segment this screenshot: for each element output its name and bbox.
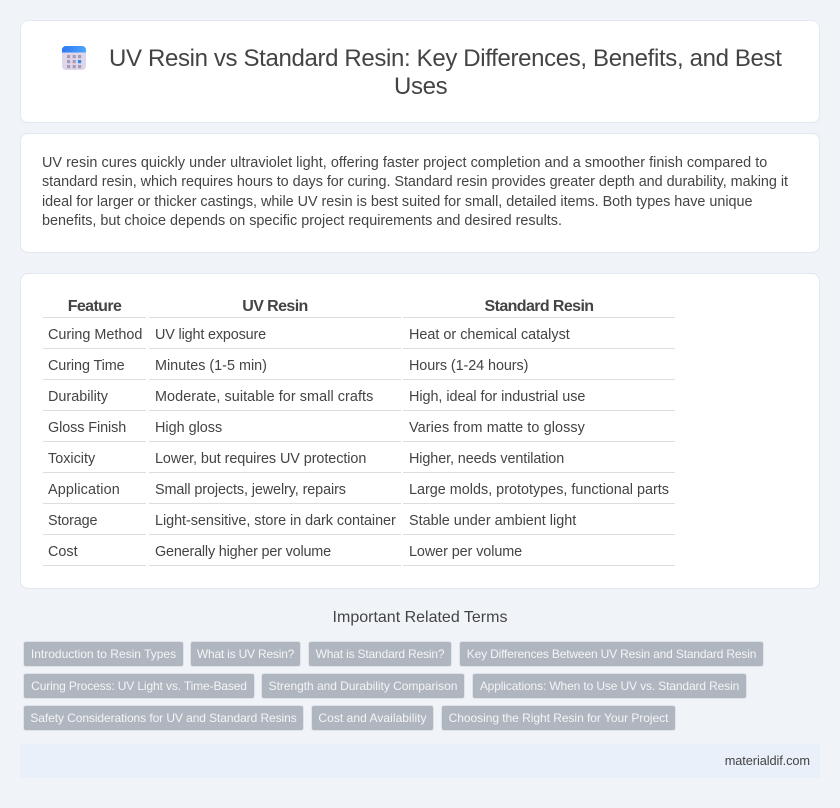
comparison table (43, 298, 675, 566)
tag list: related terms: Introduction to Resin Types (31, 647, 176, 661)
row: curing time (48, 358, 528, 374)
row: curing time: Minutes (1-5 min) (155, 358, 267, 374)
footer (20, 744, 820, 778)
row: gloss finish: Varies from matte to glossy (409, 420, 585, 436)
row: durability: Moderate, suitable for small crafts (155, 389, 373, 405)
tag list: related terms (23, 641, 764, 731)
tag list: related terms: Key Differences Between UV Resin and Standard Resin (467, 647, 756, 661)
row: application (48, 482, 669, 498)
row: toxicity: Higher, needs ventilation (409, 451, 564, 467)
row: cost: Lower per volume (409, 544, 522, 560)
row: cost: Generally higher per volume (155, 544, 331, 560)
title: UV Resin vs Standard Resin: Key Differences, Benefits, and Best (109, 45, 782, 72)
row: gloss finish (48, 420, 585, 436)
table header: UV Resin (242, 298, 308, 315)
row: curing time: Curing Time (48, 358, 125, 374)
panel: introduction (20, 133, 820, 253)
tag list: related terms: Cost and Availability (318, 711, 427, 725)
row: toxicity (48, 451, 564, 467)
row: curing method: Curing Method (48, 327, 142, 343)
panel: title header (20, 20, 820, 123)
text block: introduction: benefits, but choice depends on specific project requirements and desired results. (42, 213, 562, 229)
row: curing method (48, 327, 570, 343)
footer credit: materialdif.com (725, 753, 810, 768)
text block: introduction (42, 155, 788, 229)
tag list: related terms: Applications: When to Use UV vs. Standard Resin (480, 679, 739, 693)
text block: introduction: UV resin cures quickly under ultraviolet light, offering faster project completion and a smoother finish compared to (42, 155, 767, 171)
row: toxicity: Lower, but requires UV protection (155, 451, 366, 467)
row: durability (48, 389, 585, 405)
row: storage: Storage (48, 513, 97, 529)
tag list: related terms: What is UV Resin? (197, 647, 294, 661)
table header: Standard Resin (485, 298, 593, 315)
row: curing method: Heat or chemical catalyst (409, 327, 570, 343)
table header (68, 298, 594, 315)
row: cost (48, 544, 522, 560)
text block: introduction: standard resin, which requires hours to days for curing. Standard resin provides greater depth and durability, making it (42, 174, 788, 190)
title (109, 45, 782, 100)
row: application: Application (48, 482, 120, 498)
row: application: Large molds, prototypes, functional parts (409, 482, 669, 498)
table header: Feature (68, 298, 121, 315)
tag list: related terms: What is Standard Resin? (316, 647, 444, 661)
row: storage: Stable under ambient light (409, 513, 576, 529)
tag list: related terms: Safety Considerations for UV and Standard Resins (30, 711, 297, 725)
heading: important related terms: Important Related Terms (333, 609, 507, 626)
row: storage: Light-sensitive, store in dark container (155, 513, 396, 529)
row: gloss finish: High gloss (155, 420, 222, 436)
row: toxicity: Toxicity (48, 451, 95, 467)
panel: comparison table (20, 273, 820, 589)
row: cost: Cost (48, 544, 78, 560)
row: application: Small projects, jewelry, repairs (155, 482, 346, 498)
icon: calendar (62, 46, 86, 70)
title: Uses (394, 73, 447, 100)
row: curing method: UV light exposure (155, 327, 266, 343)
row: curing time: Hours (1-24 hours) (409, 358, 528, 374)
row: durability: High, ideal for industrial use (409, 389, 585, 405)
tag list: related terms: Strength and Durability Comparison (269, 679, 457, 693)
text block: introduction: ideal for larger or thicker castings, while UV resin is best suited for small, detailed items. Both types have unique (42, 194, 752, 210)
tag list: related terms: Choosing the Right Resin for Your Project (449, 711, 668, 725)
row: gloss finish: Gloss Finish (48, 420, 126, 436)
tag list: related terms: Curing Process: UV Light vs. Time-Based (31, 679, 247, 693)
row: durability: Durability (48, 389, 108, 405)
row: storage (48, 513, 576, 529)
